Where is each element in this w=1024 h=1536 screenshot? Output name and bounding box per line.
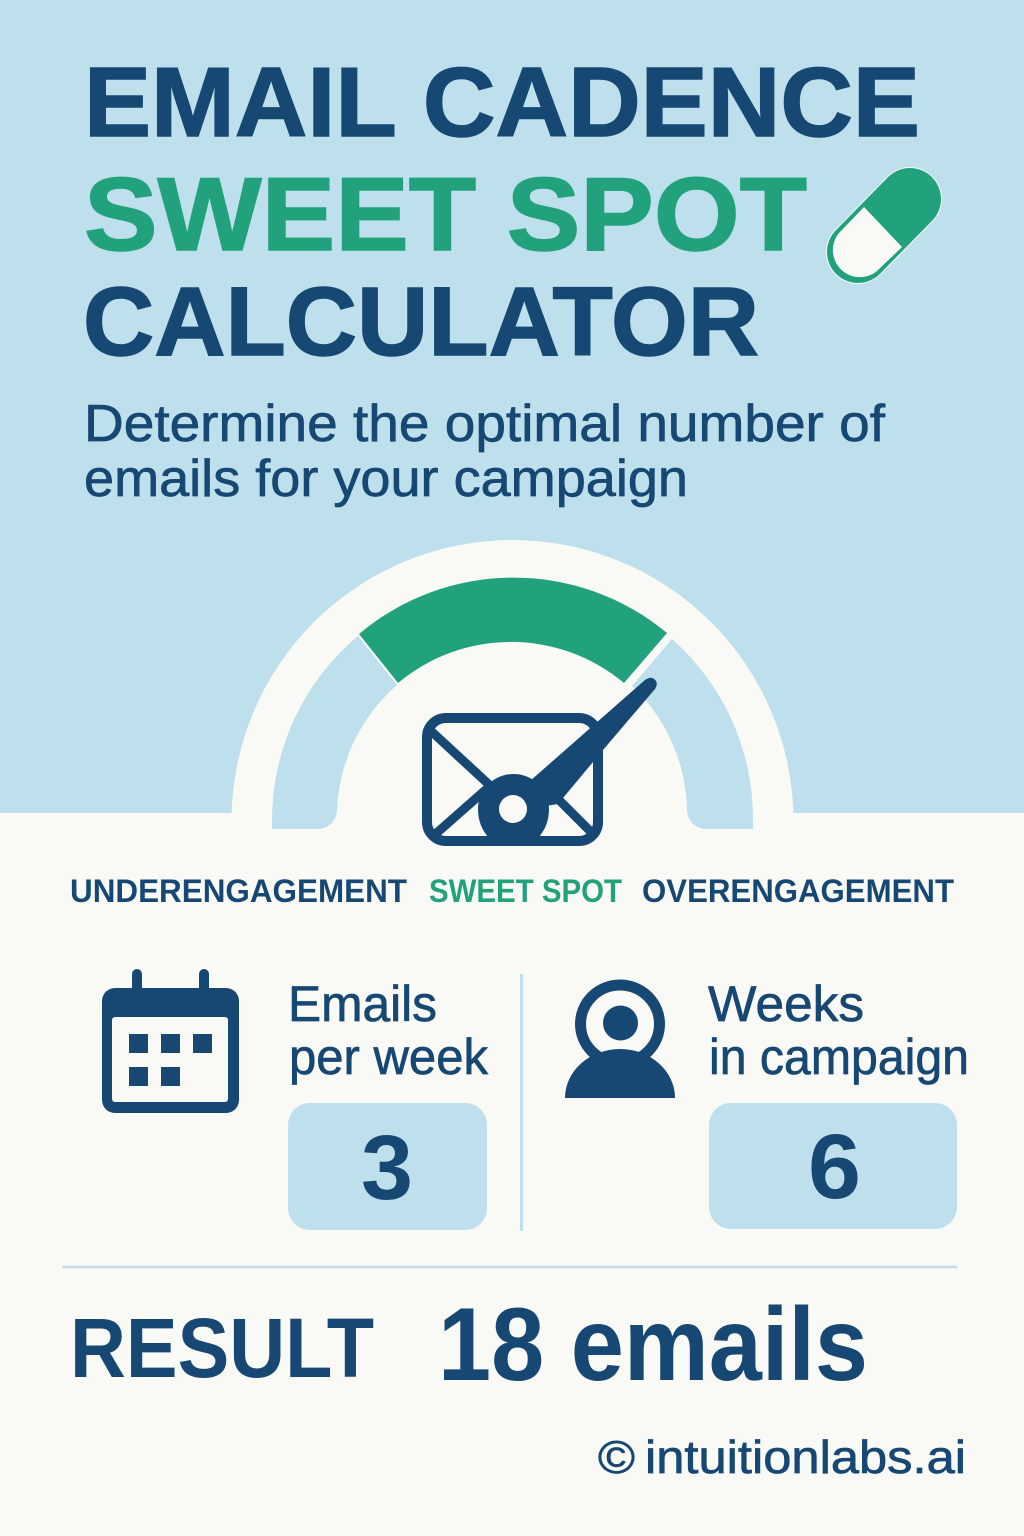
input label: emails per week: Emails xyxy=(288,976,437,1032)
input label: weeks in campaign: in campaign xyxy=(709,1029,969,1085)
gauge segment: overengagement xyxy=(632,639,753,829)
footer credit: © xyxy=(598,1431,635,1483)
input label: emails per week xyxy=(288,976,489,1085)
subtitle xyxy=(84,395,886,508)
input box: emails per week value: 3 xyxy=(361,1117,413,1219)
gauge labels: UNDERENGAGEMENT xyxy=(70,873,407,909)
subtitle: emails for your campaign xyxy=(84,450,688,508)
gauge segment: underengagement xyxy=(272,636,397,829)
icon: envelope xyxy=(427,718,598,841)
title: SWEET SPOT xyxy=(84,157,807,273)
title: CALCULATOR xyxy=(83,267,759,376)
gauge labels: OVERENGAGEMENT xyxy=(642,873,954,909)
title: EMAIL CADENCE xyxy=(84,47,920,157)
title xyxy=(83,47,920,376)
gauge labels: SWEET SPOT xyxy=(429,873,622,909)
gauge xyxy=(232,540,794,850)
input box: weeks value: 6 xyxy=(808,1116,861,1218)
icon: person in ring xyxy=(565,985,675,1098)
icon: capsule pill xyxy=(833,199,910,277)
result value: 18 emails xyxy=(438,1287,868,1403)
input label: weeks in campaign: Weeks xyxy=(708,976,864,1032)
footer credit: intuitionlabs.ai xyxy=(645,1431,966,1483)
gauge needle xyxy=(478,678,657,838)
subtitle: Determine the optimal number of xyxy=(84,395,886,453)
input box: weeks value xyxy=(709,1103,957,1229)
input label: weeks in campaign xyxy=(708,976,969,1085)
result label: RESULT xyxy=(70,1301,374,1395)
icon: calendar xyxy=(102,969,239,1113)
input box: emails per week value xyxy=(288,1103,487,1230)
input label: emails per week: per week xyxy=(289,1029,489,1085)
gauge labels xyxy=(70,873,954,909)
gauge white backing arc xyxy=(232,540,794,850)
gauge segment: sweet spot xyxy=(359,578,667,683)
